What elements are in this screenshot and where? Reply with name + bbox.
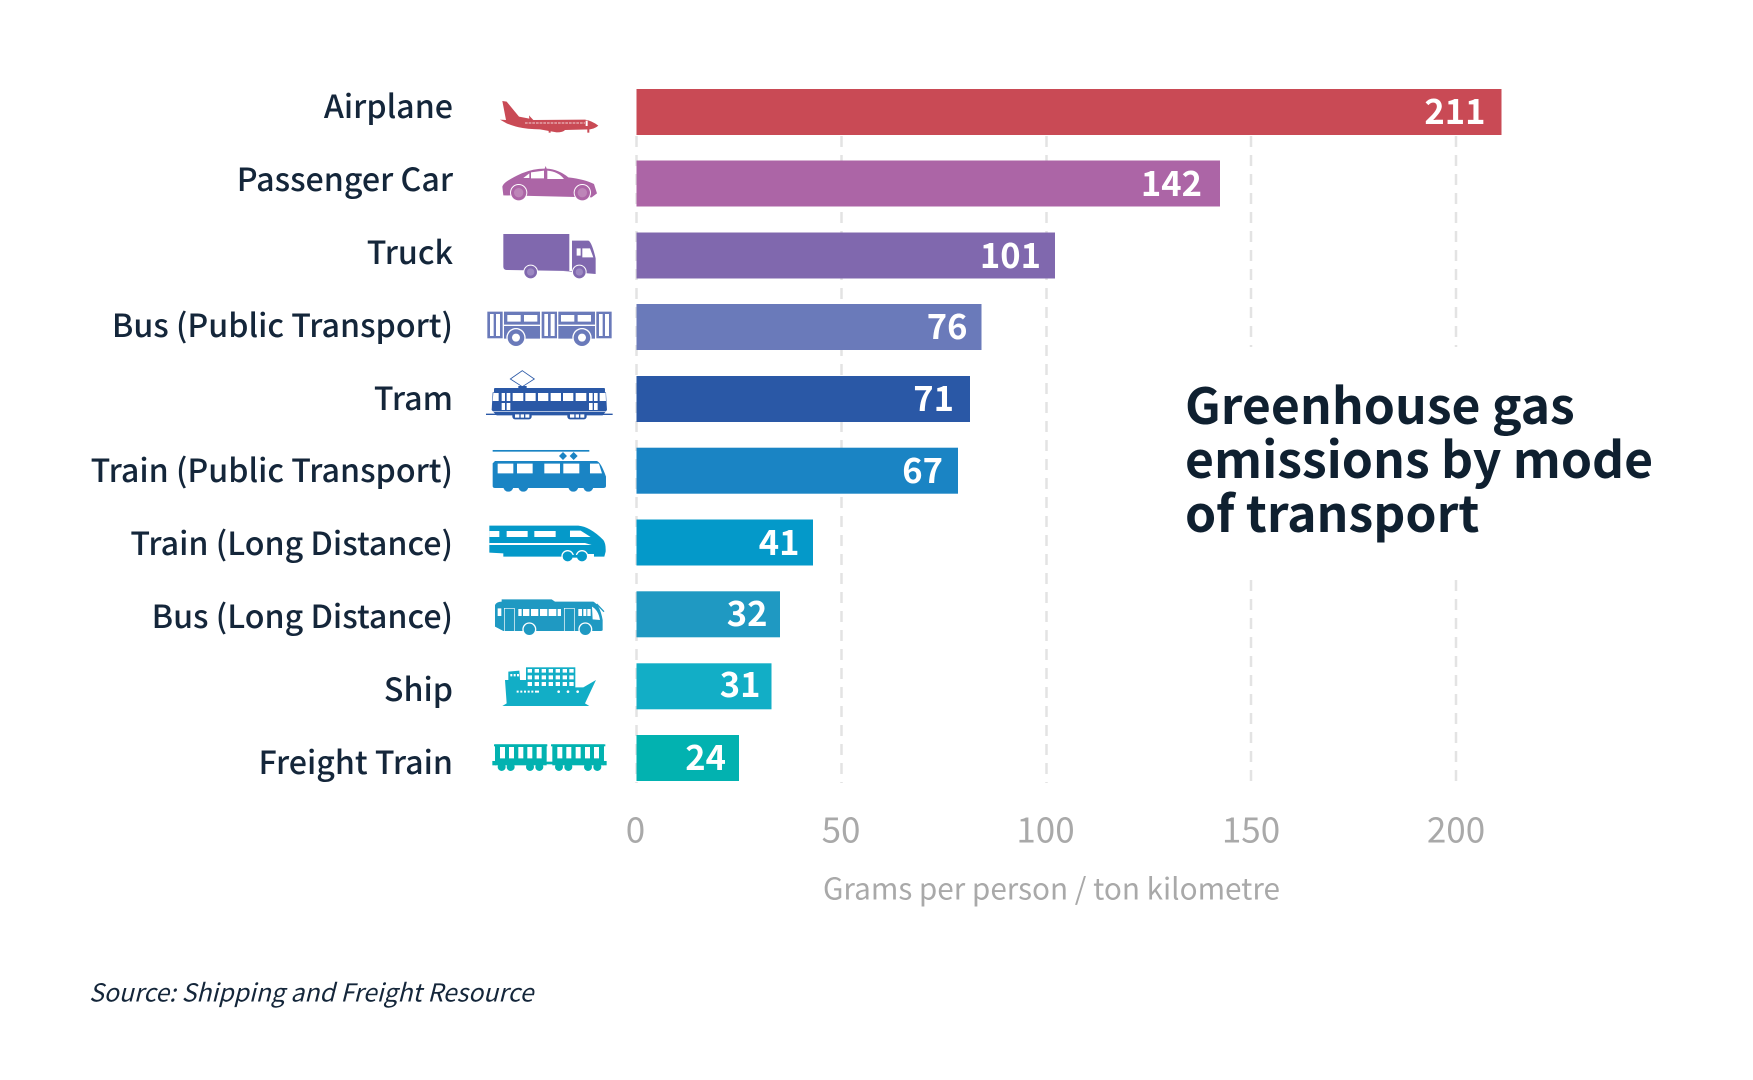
row: Tram: 71: [913, 371, 954, 421]
icon: freight train: [492, 744, 607, 771]
row: Truck: [367, 228, 1055, 278]
icon: passenger car: [502, 166, 597, 201]
row: Ship: [384, 657, 772, 711]
row: Freight Train: [258, 730, 739, 784]
title: of transport: [1185, 475, 1479, 547]
row: Bus (Long Distance): 32: [727, 586, 768, 636]
icon: truck: [503, 234, 596, 279]
icon: articulated bus: [487, 312, 612, 347]
row: Bus (Public Transport): 76: [927, 299, 968, 349]
row: Tram: [374, 371, 970, 422]
row: Passenger Car: Passenger Car: [237, 155, 454, 201]
row: Airplane: 211: [1424, 84, 1486, 134]
title: [1185, 367, 1653, 547]
row: Truck: 101: [980, 228, 1041, 278]
icon: airplane: [500, 101, 598, 133]
x axis: 50: [822, 802, 860, 854]
row: Train (Public Transport): [91, 443, 958, 494]
row: Bus (Long Distance): [152, 586, 780, 638]
row: Passenger Car: [237, 155, 1220, 206]
icon: tram: [486, 371, 613, 419]
row: Ship: 31: [720, 657, 760, 707]
row: Airplane: Airplane: [324, 82, 453, 128]
title: Greenhouse gas: [1185, 367, 1575, 439]
icon: coach bus: [495, 599, 604, 636]
row: Ship: Ship: [384, 665, 453, 711]
x axis: 0: [626, 802, 645, 854]
row: Train (Public Transport): Train (Public Transport): [91, 446, 453, 492]
row: Truck: Truck: [367, 228, 453, 274]
row: Bus (Public Transport): Bus (Public Transport): [112, 301, 453, 347]
icon: container ship: [502, 667, 596, 706]
source note: Source: Shipping and Freight Resource: [89, 974, 536, 1010]
title: emissions by mode: [1185, 421, 1653, 493]
x axis: [626, 802, 1485, 854]
x axis: 100: [1016, 802, 1075, 854]
row: Train (Long Distance): [130, 515, 813, 566]
x axis: 200: [1427, 802, 1485, 854]
row: Passenger Car: 142: [1141, 156, 1202, 206]
row: Train (Public Transport): 67: [902, 443, 943, 493]
icon: high-speed train: [489, 526, 606, 563]
row: Bus (Public Transport): [112, 299, 982, 350]
axis title: Grams per person / ton kilometre: [823, 866, 1280, 908]
row: Train (Long Distance): Train (Long Distance): [130, 519, 453, 565]
row: Train (Long Distance): 41: [759, 515, 800, 565]
row: Freight Train: 24: [685, 730, 726, 780]
row: Freight Train: Freight Train: [258, 738, 453, 784]
row: Tram: Tram: [374, 374, 453, 420]
row: Bus (Long Distance): Bus (Long Distance): [152, 592, 453, 638]
row: Airplane: [324, 82, 1502, 135]
x axis: 150: [1222, 802, 1280, 854]
bar chart: [91, 82, 1502, 784]
icon: electric train: [493, 450, 606, 492]
